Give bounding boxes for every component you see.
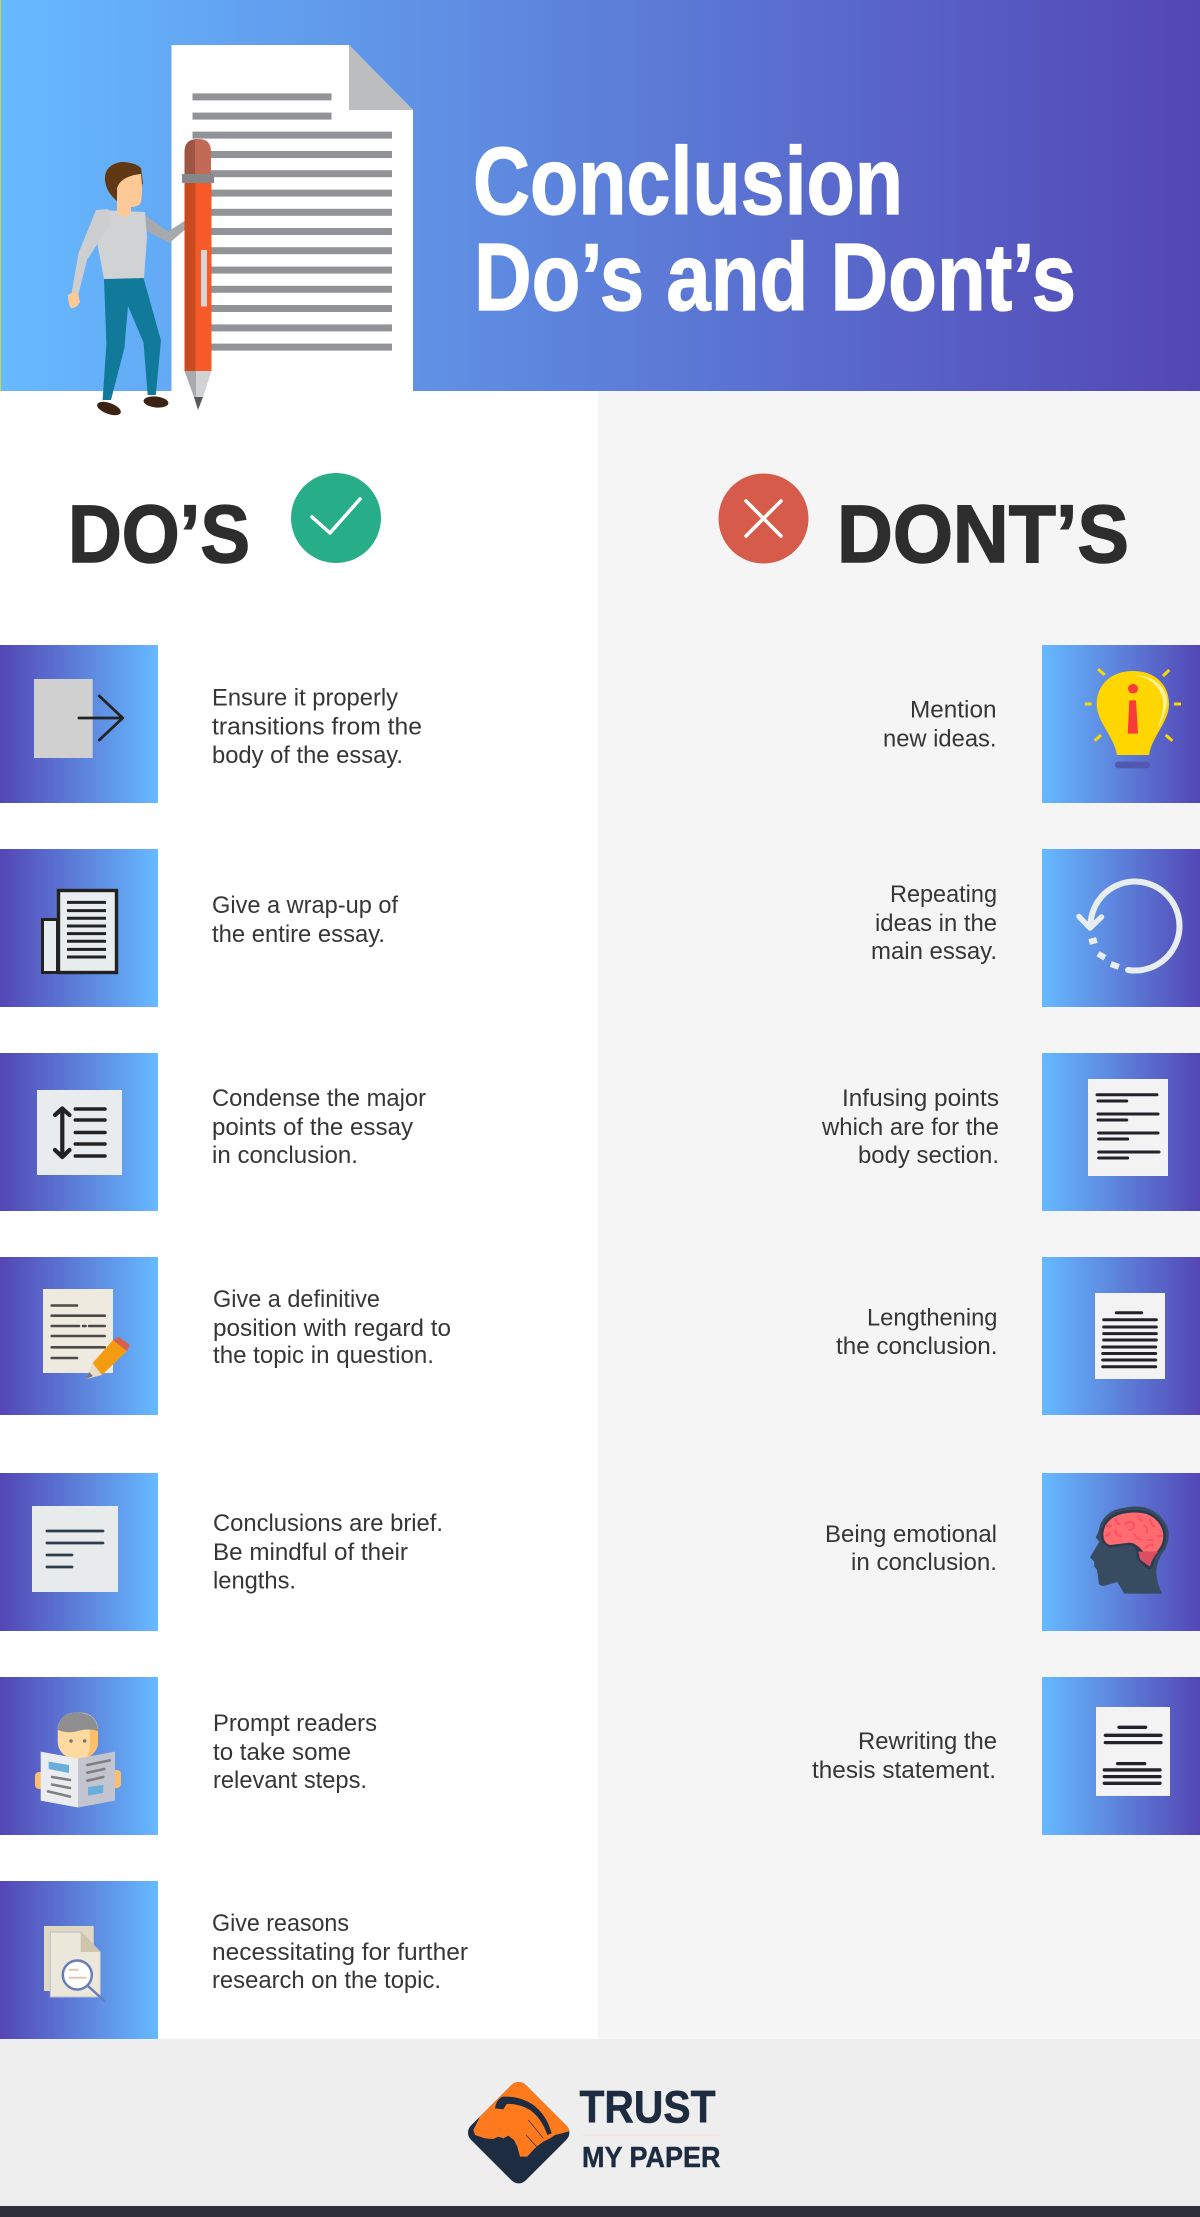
do item 3 [0, 1053, 426, 1211]
text [825, 1521, 997, 1576]
icon: person reading newspaper [35, 1713, 121, 1808]
do item 6 [0, 1677, 377, 1835]
logo mark [468, 2082, 570, 2184]
text [213, 1710, 377, 1794]
icon: long text page [1095, 1293, 1165, 1379]
do item 7 [0, 1881, 468, 2039]
text: in conclusion. [851, 1549, 997, 1576]
text: Rewriting the [858, 1728, 997, 1755]
heading: do's: DO’S [68, 489, 250, 580]
text [212, 1085, 426, 1169]
text: Be mindful of their [213, 1539, 408, 1566]
logo wordmark [580, 2082, 721, 2174]
text [871, 881, 997, 965]
text: Condense the major [212, 1085, 426, 1112]
text: relevant steps. [213, 1767, 367, 1794]
dont item 5 [825, 1473, 1200, 1631]
do item 2 [0, 849, 398, 1007]
dont item 4 [836, 1257, 1200, 1415]
text: Give reasons [212, 1910, 349, 1937]
do item 1 [0, 645, 422, 803]
text: to take some [213, 1739, 351, 1766]
text: new ideas. [883, 726, 996, 752]
illustration: pen [182, 139, 214, 410]
text: Give a wrap-up of [212, 892, 398, 919]
text: ideas in the [875, 910, 997, 937]
text: Being emotional [825, 1521, 997, 1548]
panel: header banner [0, 0, 1200, 391]
icon: paper and pencil [43, 1289, 130, 1379]
text: body section. [858, 1142, 999, 1169]
icon: page with arrow [34, 679, 123, 758]
text: the entire essay. [212, 921, 385, 948]
text: Infusing points [842, 1085, 999, 1112]
dont item 1 [883, 645, 1200, 803]
text: Prompt readers [213, 1710, 377, 1737]
do item 5 [0, 1473, 443, 1631]
title: Conclusion [473, 128, 903, 235]
panel: dont's background [598, 391, 1200, 2039]
text [883, 696, 996, 752]
text: which are for the [821, 1114, 999, 1141]
text: position with regard to [213, 1315, 451, 1342]
text [213, 1286, 451, 1369]
icon: documents [42, 890, 116, 972]
text [812, 1728, 997, 1784]
text [821, 1085, 999, 1169]
text: lengths. [213, 1568, 296, 1594]
text: necessitating for further [212, 1939, 468, 1966]
icon: text paragraphs [1088, 1079, 1168, 1176]
illustration: document page [172, 45, 413, 391]
title: Do’s and Dont’s [474, 224, 1076, 331]
title [473, 128, 1076, 331]
icon: head with brain [1090, 1507, 1169, 1594]
icon: document with magnifier [44, 1926, 105, 2002]
dont item 6 [812, 1677, 1200, 1835]
text [212, 1910, 468, 1994]
text [212, 892, 398, 948]
text: main essay. [871, 938, 997, 965]
text: body of the essay. [212, 742, 403, 769]
text: transitions from the [212, 714, 422, 740]
text [213, 1510, 443, 1594]
dont item 3 [821, 1053, 1200, 1211]
logo wordmark: MY PAPER [582, 2142, 721, 2174]
text: the topic in question. [213, 1342, 434, 1369]
icon: thesis statement page [1096, 1707, 1170, 1796]
text: the conclusion. [836, 1333, 998, 1360]
text: in conclusion. [212, 1142, 358, 1169]
icon: green check [291, 473, 381, 563]
text: Ensure it properly [212, 684, 398, 712]
icon: condense list [37, 1090, 122, 1175]
text: Repeating [890, 881, 997, 908]
logo wordmark: TRUST [580, 2082, 716, 2132]
text: Give a definitive [213, 1286, 380, 1313]
text [212, 684, 422, 769]
icon: short text page [32, 1506, 118, 1592]
do item 4 [0, 1257, 451, 1415]
text: Conclusions are brief. [213, 1510, 443, 1537]
icon: light bulb [1085, 669, 1181, 768]
text: Lengthening [867, 1304, 998, 1332]
illustration: person [68, 162, 184, 418]
text: Mention [910, 696, 996, 724]
footer panel [0, 2039, 1200, 2217]
text: research on the topic. [212, 1967, 441, 1994]
icon: red cross [718, 474, 808, 564]
text [836, 1304, 998, 1360]
text: points of the essay [212, 1114, 413, 1141]
dont item 2 [871, 849, 1200, 1007]
heading: dont's: DONT’S [837, 489, 1129, 580]
text: thesis statement. [812, 1757, 996, 1784]
icon: repeat arrow [1079, 882, 1180, 971]
